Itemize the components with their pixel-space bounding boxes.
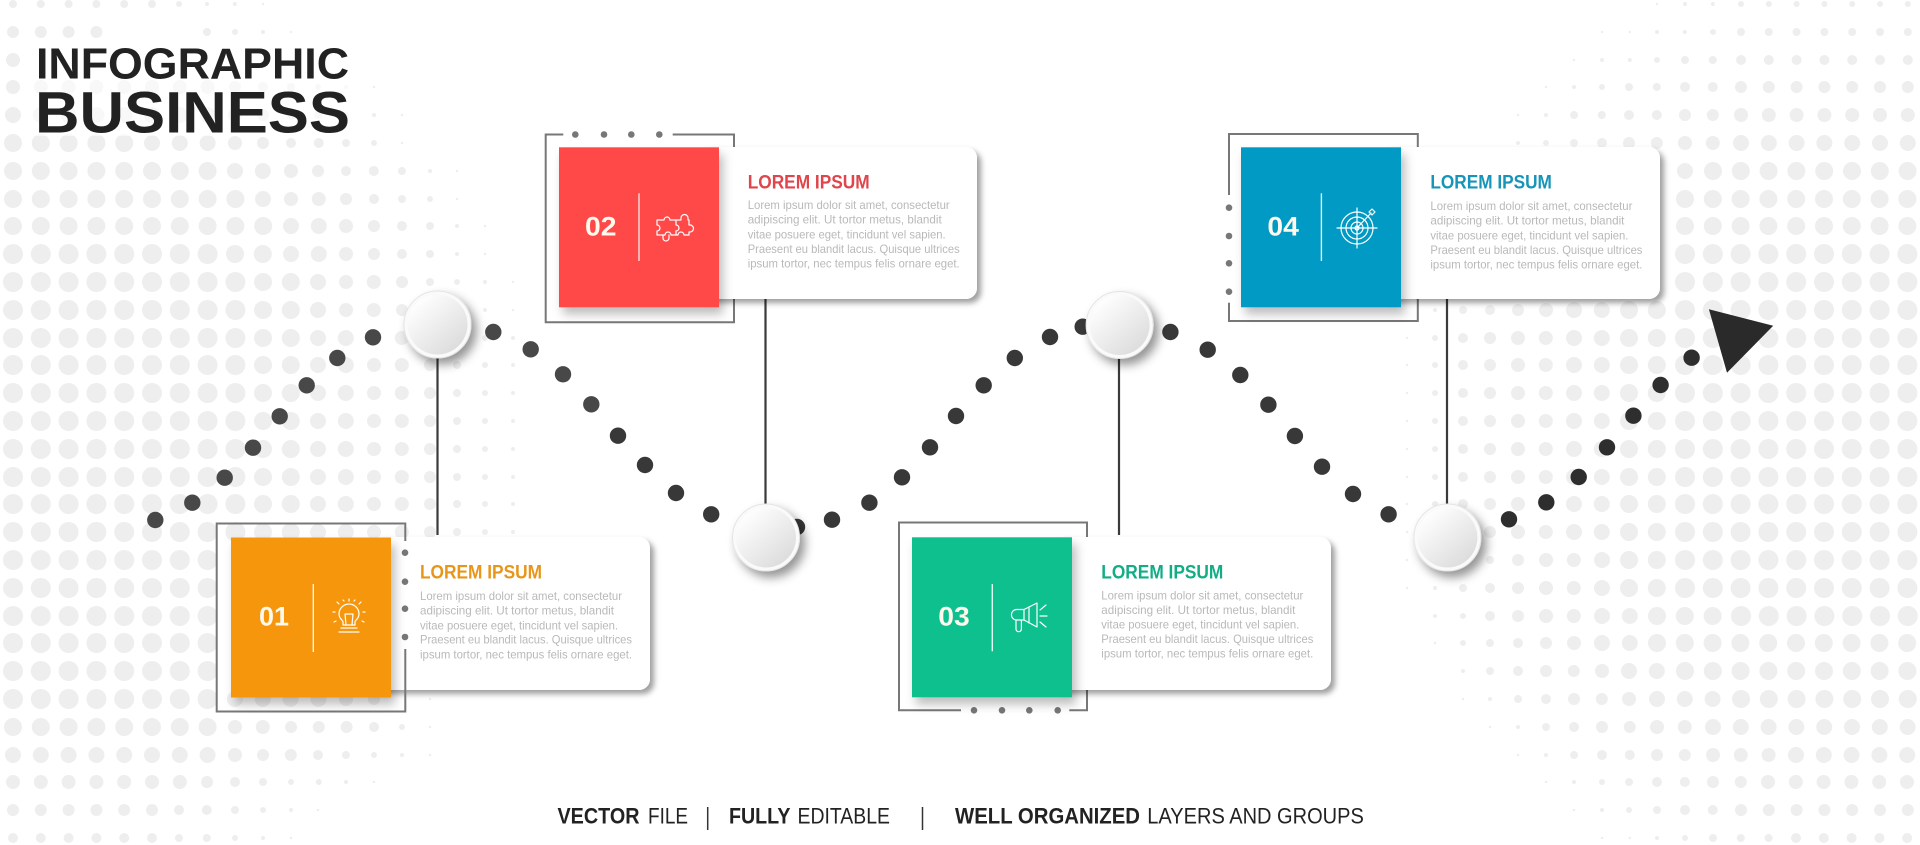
panel: step 02 [546,131,977,322]
body text 03: vitae posuere eget, tincidunt vel sapien. [1101,618,1299,632]
footer tagline: FILE [648,804,688,828]
body text 01: adipiscing elit. Ut tortor metus, blandit [420,604,615,618]
number 01: 01 [259,602,289,632]
body text 04: vitae posuere eget, tincidunt vel sapien. [1430,228,1628,242]
title [35,40,350,146]
body text 02 [748,198,960,271]
body text 02: Praesent eu blandit lacus. Quisque ultrices [748,242,960,256]
frame with dots 04 [1226,134,1418,321]
divider 01 [312,584,314,652]
heading 01: LOREM IPSUM [420,561,542,583]
icon: megaphone [1011,603,1047,632]
text card 03 [1051,537,1331,690]
divider 02 [638,193,640,261]
body text 01: ipsum tortor, nec tempus felis ornare eget. [420,647,632,661]
heading 03: LOREM IPSUM [1101,561,1223,583]
colour square 03 [912,537,1072,697]
node circle 1 [404,291,471,358]
frame with dots 02 [546,131,734,322]
text card 02 [697,147,977,299]
footer tagline: VECTOR [558,804,640,828]
title: BUSINESS [35,81,350,146]
icon: target [1337,208,1377,248]
frame with dots 01 [217,524,408,712]
body text 02: ipsum tortor, nec tempus felis ornare eget. [748,257,960,271]
footer tagline: FULLY [729,804,790,828]
number 03: 03 [938,601,970,631]
panel: step 01 [217,524,650,712]
footer tagline: LAYERS AND GROUPS [1147,804,1364,828]
number 04: 04 [1267,211,1299,241]
node circle 3 [1086,292,1153,358]
heading 04: LOREM IPSUM [1430,171,1552,193]
arrow head [1709,309,1773,373]
body text 02: Lorem ipsum dolor sit amet, consectetur [748,198,950,212]
body text 04: ipsum tortor, nec tempus felis ornare eget. [1430,258,1642,272]
colour square 01 [231,538,391,698]
frame with dots 03 [899,522,1087,714]
text card 01 [370,537,650,690]
colour square 04 [1241,147,1401,307]
number 02: 02 [585,212,616,242]
body text 04 [1430,199,1642,272]
body text 01: Lorem ipsum dolor sit amet, consectetur [420,589,622,603]
divider 04 [1320,193,1322,261]
body text 02: adipiscing elit. Ut tortor metus, blandit [748,213,942,227]
body text 04: adipiscing elit. Ut tortor metus, blandit [1430,214,1625,228]
body text 04: Lorem ipsum dolor sit amet, consectetur [1430,199,1632,213]
body text 03: ipsum tortor, nec tempus felis ornare eget. [1101,647,1313,661]
dotted path [147,318,1700,535]
footer tagline [558,804,1364,830]
title: INFOGRAPHIC [36,40,349,88]
node circle 2 [732,504,800,571]
text card 04 [1380,147,1660,299]
body text 03: adipiscing elit. Ut tortor metus, blandit [1101,603,1296,617]
footer tagline: WELL ORGANIZED [955,804,1140,828]
body text 03: Praesent eu blandit lacus. Quisque ultrices [1101,632,1313,646]
node circle 4 [1414,504,1481,571]
heading 02: LOREM IPSUM [748,171,870,193]
body text 01: vitae posuere eget, tincidunt vel sapien. [420,618,618,632]
icon: light bulb [333,599,365,632]
colour square 02 [559,147,719,307]
panel: step 04 [1226,134,1660,321]
body text 04: Praesent eu blandit lacus. Quisque ultrices [1430,243,1642,257]
body text 03 [1101,588,1313,661]
icon: puzzle [657,215,694,241]
body text 01: Praesent eu blandit lacus. Quisque ultrices [420,633,632,647]
body text 01 [420,589,632,661]
footer tagline: EDITABLE [798,804,890,828]
divider 03 [991,584,993,651]
body text 03: Lorem ipsum dolor sit amet, consectetur [1101,588,1303,602]
panel: step 03 [899,522,1331,714]
body text 02: vitae posuere eget, tincidunt vel sapien. [748,227,946,241]
connector lines [438,299,1447,535]
